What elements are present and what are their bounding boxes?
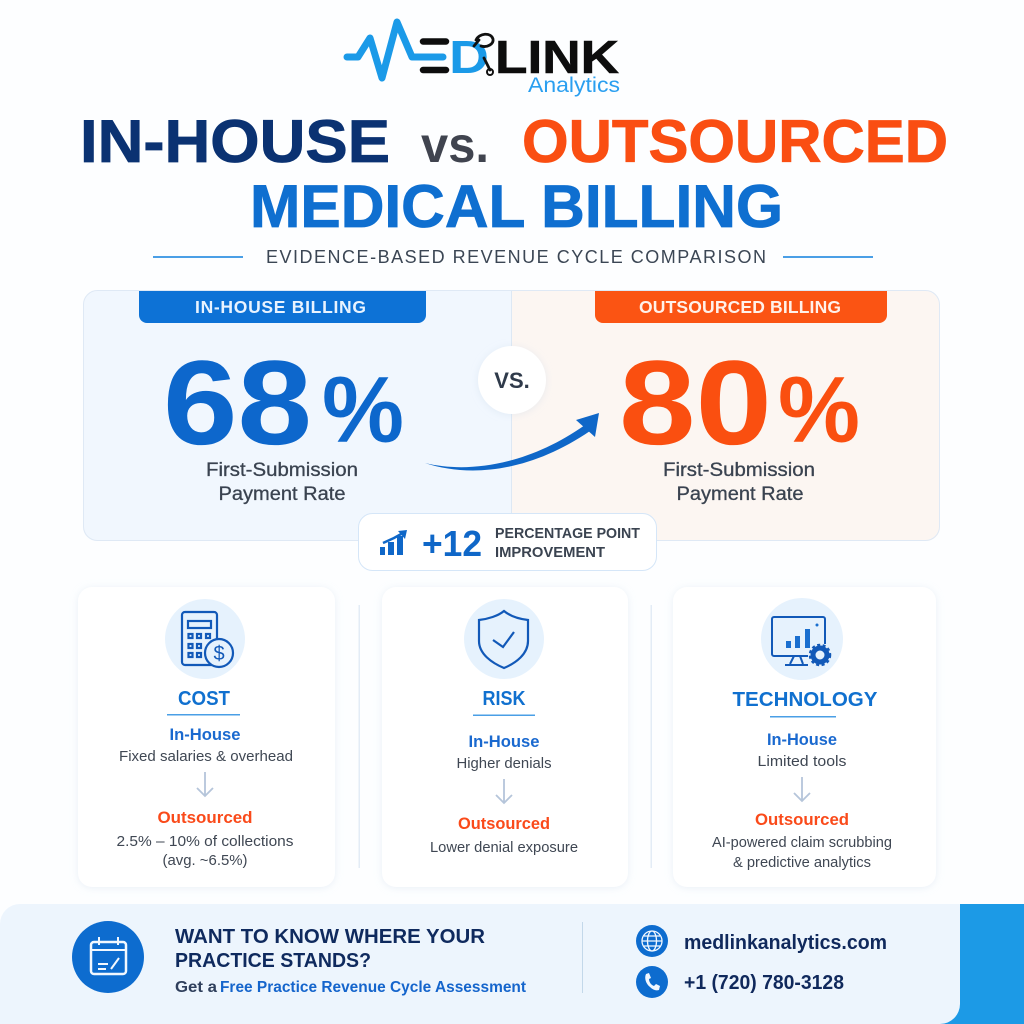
phone contact: +1 (720) 780-3128 [684,972,844,994]
call to action: Free Practice Revenue Cycle Assessment [220,979,526,996]
heading: COST [178,688,230,710]
improvement pill [358,514,656,570]
in-house text: In-House [170,726,240,744]
footer band [0,904,1024,1024]
in-house text: Fixed salaries & overhead [119,748,293,765]
title [80,108,948,240]
in-house text [758,731,846,770]
in-house badge [139,291,426,323]
in-house text: In-House [767,731,837,749]
icon: calendar [72,921,144,993]
stat: 68%: % [322,357,404,462]
outsourced label: First-Submission [663,460,815,481]
outsourced label: Payment Rate [676,484,804,505]
website contact: medlinkanalytics.com [684,932,887,954]
outsourced text [430,815,578,856]
call to action [175,926,526,996]
outsourced badge [595,291,887,323]
outsourced text: 2.5% – 10% of collections [116,833,294,850]
icon: calculator: $ [213,643,225,665]
outsourced badge: OUTSOURCED BILLING [639,297,841,317]
in-house text: Higher denials [456,755,552,772]
logo: LINK [495,31,619,83]
in-house text [456,733,552,772]
panel: technology [673,587,936,887]
subtitle: EVIDENCE-BASED REVENUE CYCLE COMPARISON [266,247,766,267]
panel: first-submission comparison [83,290,940,570]
icon: rising bars [380,530,407,555]
icon: down arrow [496,779,512,803]
icon: down arrow [794,777,810,801]
stat: 68%: 68 [163,336,312,470]
in-house text: Limited tools [758,753,846,770]
icon: down arrow [197,772,213,796]
in-house badge: IN-HOUSE BILLING [195,297,366,317]
title: MEDICAL BILLING [250,173,783,240]
in-house label: Payment Rate [218,484,346,505]
title: OUTSOURCED [522,108,948,175]
stat: 80% [619,336,860,470]
stat: 80%: % [778,357,860,462]
outsourced text: Outsourced [458,815,550,833]
logo: D [449,31,489,83]
vs badge: VS. [494,368,530,393]
icon: monitor and gear [761,598,843,680]
outsourced text: Outsourced [755,811,849,829]
call to action: WANT TO KNOW WHERE YOUR [175,926,486,948]
in-house label [206,460,358,505]
outsourced text: & predictive analytics [733,854,871,871]
phone contact [636,966,844,998]
outsourced text: (avg. ~6.5%) [162,852,248,869]
outsourced text [116,809,294,869]
title: vs. [421,117,489,173]
arrow [425,413,599,470]
title: IN-HOUSE [80,108,390,175]
improvement pill: IMPROVEMENT [495,544,605,561]
icon: shield [464,599,544,679]
panel: risk [382,587,628,887]
stat: 68% [163,336,404,470]
outsourced label [663,460,815,505]
outsourced text: Lower denial exposure [430,839,578,856]
in-house text: In-House [468,733,540,751]
call to action: Get a [175,979,217,996]
heading: RISK [482,688,526,710]
stat: 80%: 80 [619,336,772,470]
outsourced text [712,811,892,871]
panel: cost [78,587,335,887]
improvement pill: PERCENTAGE POINT [495,525,640,542]
call to action: PRACTICE STANDS? [175,950,371,972]
website contact [636,925,887,957]
in-house label: First-Submission [206,460,358,481]
improvement pill: +12 [422,523,482,564]
vs badge [478,346,546,414]
logo: Analytics [528,74,620,97]
outsourced text: AI-powered claim scrubbing [712,834,892,851]
outsourced text: Outsourced [158,809,252,827]
logo [347,22,620,97]
icon: calculator [165,599,245,679]
in-house text [119,726,293,765]
heading: TECHNOLOGY [732,689,878,711]
